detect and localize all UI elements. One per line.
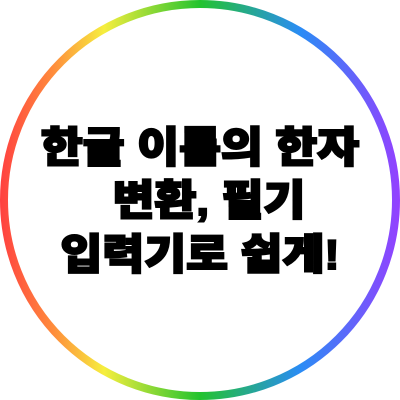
title line 1: 한글 이름의 한자 <box>41 124 359 171</box>
title line 3: 입력기로 쉽게! <box>61 231 339 278</box>
title <box>41 124 360 278</box>
title line 2: 변환, 필기 <box>113 177 305 224</box>
